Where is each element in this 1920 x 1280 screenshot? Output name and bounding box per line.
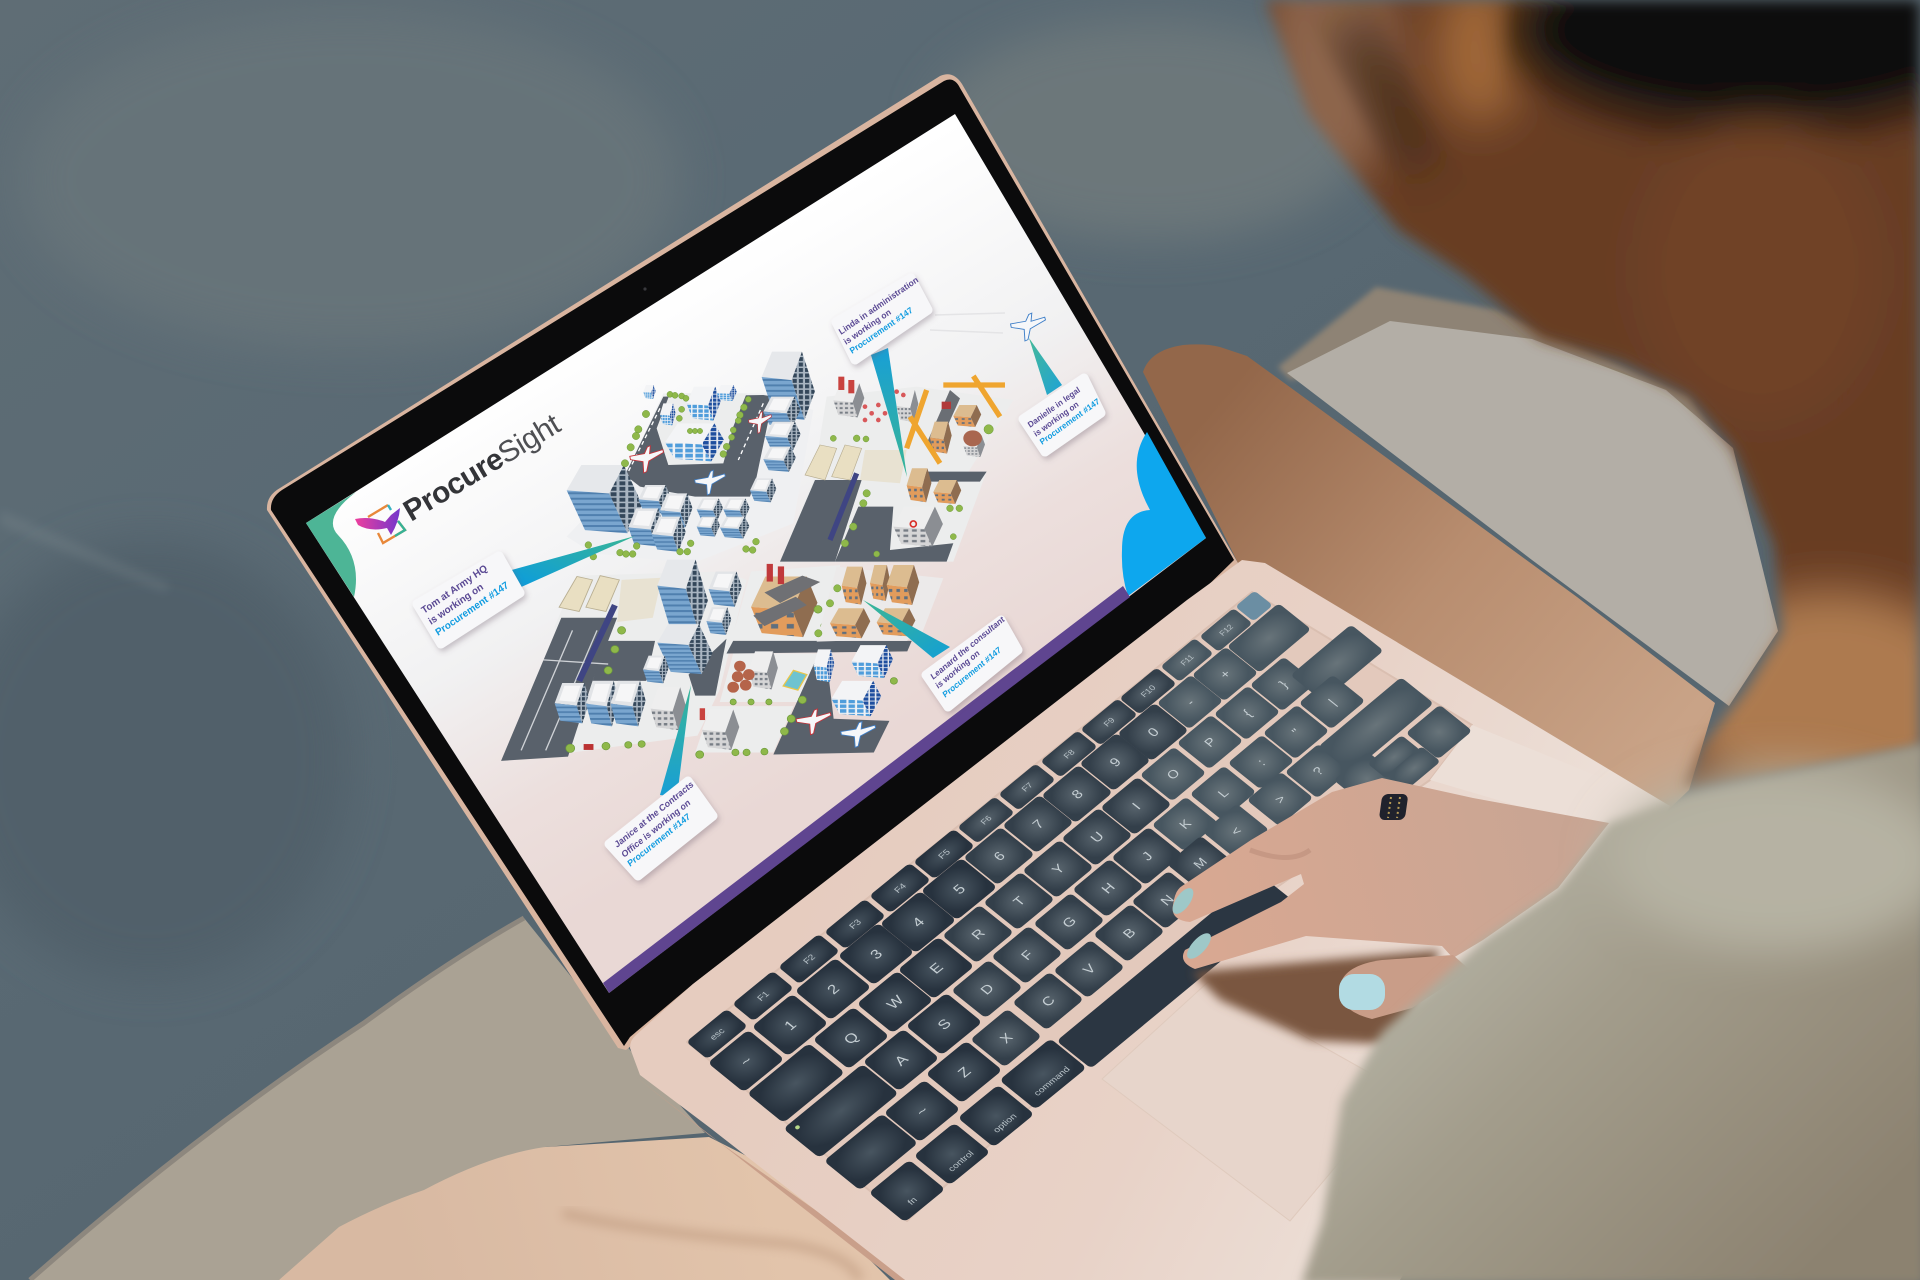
finger crease [1250,850,1310,858]
callout: Danielle in legal [1023,378,1102,452]
home row: H [1098,880,1118,896]
callout: Linda in administration [836,274,928,360]
number row: 8 [1068,787,1086,801]
home row: " [1289,726,1304,738]
block: bottom-centre industry [695,564,912,758]
callout: Tom at Army HQ [417,556,520,644]
corner shape: blue cloud [1122,432,1206,596]
lower letter row: ? [1310,764,1327,778]
home row: G [1059,914,1079,930]
home row: A [891,1052,913,1069]
callout: Danielle in legal: is working on [1032,399,1080,439]
number row: 5 [950,882,969,897]
person: shirt, out of focus [1301,743,1920,1280]
callout: Danielle in legal: Procurement #147 [1038,396,1102,447]
function row: F10 [1138,683,1158,699]
function row: F6 [978,814,994,826]
callout beam: Linda [871,348,907,477]
hand and fingers [1173,778,1609,969]
callout: Janice at the Contracts Office: Procurement #147 [626,811,692,869]
laptop lid [267,74,1238,1050]
function row: F3 [847,918,863,931]
function row: F5 [936,848,952,861]
QWERTY row: R [968,926,988,942]
light palm rest right of keyboard [1430,725,1666,830]
QWERTY row: U [1087,829,1107,845]
function row: F4 [892,882,908,895]
home row: D [977,981,997,997]
callout: Leanard the consultant [926,614,1018,707]
arm: right forearm behind the laptop [1143,344,1715,812]
bottom modifier row with space bar [869,705,1472,1222]
lid bezel: black [271,80,1234,1046]
home row: K [1176,817,1194,832]
function row: F11 [1179,653,1196,667]
number row [708,603,1311,1092]
webcam [643,287,647,291]
callout: Leanard the consultant: Leanard the consultant [929,614,1006,682]
callout: Leanard the consultant: is working on [934,647,981,691]
lower letter row: B [1119,925,1139,941]
bottom modifier row with space bar: command [1032,1065,1072,1098]
QWERTY row: { [1240,707,1255,719]
home row: J [1138,849,1156,863]
nail: middle finger [1183,929,1215,963]
QWERTY row: W [884,992,908,1012]
home row: : [1254,756,1268,768]
QWERTY row: Q [841,1030,863,1047]
callout: Tom at Army HQ: Procurement #147 [434,580,511,639]
lower letter row: Z [955,1064,975,1081]
callout beam: Danielle [1029,338,1062,395]
couch: lower left [30,918,705,1280]
number row: 6 [990,849,1008,863]
bottom modifier row with space bar: control [946,1149,976,1173]
number row: - [1183,696,1198,708]
couch: upper right [1278,287,1778,706]
callout: Janice at the Contracts Office: Janice at the Contracts [613,779,695,850]
lower letter row: ~ [913,1103,933,1120]
callout: Leanard the consultant: Procurement #147 [941,644,1003,700]
home row: F [1018,947,1037,963]
thumb [1340,955,1470,1019]
lower letter row: < [1227,824,1245,838]
callout beam: Leanard [863,600,950,658]
trackpad [1102,982,1400,1221]
number row: 4 [909,915,928,930]
lower letter row: X [996,1030,1016,1046]
function row: esc [708,1026,727,1042]
lower letter row [824,677,1434,1190]
nail: thumb [1339,974,1385,1010]
bottom modifier row with space bar: fn [906,1196,919,1207]
hand with painted nails and ring [1169,778,1609,1019]
lower letter row: N [1157,892,1177,908]
leg: lower left thigh [279,1137,890,1280]
laptop base [630,560,1670,1280]
callout: Linda in administration: Procurement #147 [848,305,915,356]
block: orange apartments [815,565,943,642]
lower letter row: V [1079,961,1099,977]
QWERTY row: T [1010,893,1029,909]
callout: Tom at Army HQ: is working on [427,582,486,628]
corner shape: green [306,492,356,597]
block: bottom-left terminal [501,560,747,761]
keyboard [686,591,1472,1222]
QWERTY row: P [1201,735,1219,750]
number row: ~ [737,1053,757,1070]
function row: F1 [755,990,771,1003]
lid edge: rose gold [267,74,1238,1050]
callout: Danielle in legal: Danielle in legal [1026,384,1082,430]
home row [783,675,1365,1158]
home row: S [934,1016,955,1033]
function row: F9 [1101,716,1117,728]
callout beam: Janice [660,685,691,797]
callout: Linda in administration: is working on [842,307,893,347]
function row: F8 [1061,748,1077,760]
number row: + [1216,667,1234,681]
isometric city map: lower-left blocks [501,560,912,761]
number row: 3 [867,947,886,962]
number row: 0 [1144,725,1162,739]
callout: Janice at the Contracts Office: Office is working on [620,797,692,860]
callout: Janice at the Contracts Office [609,779,713,876]
function row: F2 [801,953,817,966]
callout: Linda in administration: Linda in administration [837,274,920,337]
home row: | [1325,696,1339,708]
number row: 9 [1106,755,1124,769]
QWERTY row: Y [1048,861,1068,877]
number row: 1 [781,1018,800,1033]
function row: F12 [1217,623,1236,637]
hand shadow on trackpad [1192,950,1440,1045]
logo icon [355,505,405,543]
logo wordmark: ProcureSight [398,407,567,528]
lower letter row: C [1038,993,1058,1009]
callout beam: Tom [508,536,635,588]
isometric city map: right part [780,376,1013,642]
QWERTY row: E [926,960,947,977]
person: head and neck, out of focus [1220,0,1920,810]
bottom modifier row with space bar: option [991,1112,1019,1134]
QWERTY row: I [1128,800,1144,812]
block: top-right construction [780,376,1013,562]
screen [306,114,1206,993]
logo: ProcureSight [355,407,567,543]
plane in flight with speed lines [930,313,1045,341]
callout: Tom at Army HQ: Tom at Army HQ [420,563,490,617]
footer strip: purple [603,586,1130,993]
ring [1379,794,1408,820]
QWERTY row: } [1276,678,1291,690]
lower letter row: > [1271,792,1289,806]
nail: index finger [1169,885,1197,917]
QWERTY row [747,624,1384,1123]
function row: F7 [1019,781,1035,793]
number row: 2 [824,982,843,997]
isometric city map: top-left airport block [567,352,815,563]
keyboard well [687,592,1472,1221]
home row: L [1215,786,1232,800]
number row: 7 [1029,817,1047,831]
function row [686,591,1273,1059]
lower letter row: M [1190,855,1210,871]
QWERTY row: O [1163,766,1183,782]
